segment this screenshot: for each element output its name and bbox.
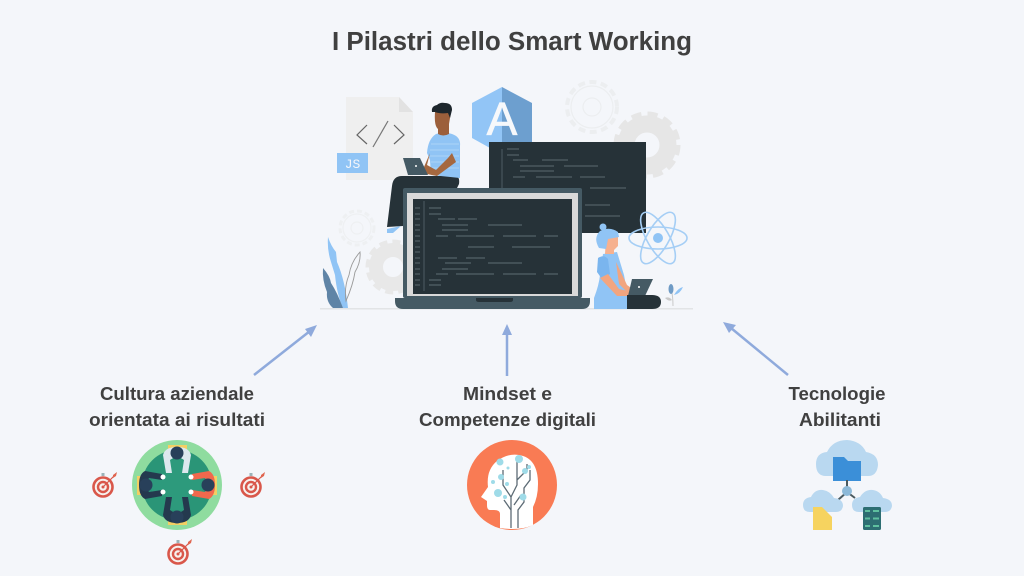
icon: target left <box>94 472 117 496</box>
label: Mindset e Competenze digitali <box>419 383 596 430</box>
icon: code document <box>346 97 413 180</box>
icon: grey gear right <box>616 114 678 176</box>
right person <box>192 471 217 499</box>
icon: React atom <box>629 207 687 269</box>
icon: grey gear lower left <box>368 242 418 292</box>
icon: outline gear lower left <box>340 211 374 245</box>
JS tag <box>337 153 368 173</box>
label: Cultura aziendale <box>89 383 265 430</box>
right cloud with server <box>852 490 892 530</box>
icon: Angular hexagon <box>472 87 532 152</box>
left cloud with document <box>803 490 843 530</box>
woman sitting with laptop <box>594 224 661 309</box>
central illustration: developers at work <box>320 82 693 310</box>
arrow: left pillar to illustration <box>254 325 317 375</box>
label: Mindset e Competenze digitali: Mindset e <box>463 383 552 404</box>
title: I Pilastri dello Smart Working <box>332 28 692 56</box>
connector <box>838 480 855 500</box>
label: Cultura aziendale: Cultura aziendale <box>100 383 254 404</box>
label: Tecnologie Abilitanti: Tecnologie <box>788 383 886 404</box>
left person <box>137 471 162 499</box>
JS tag: JS <box>345 157 360 172</box>
front laptop with code <box>395 188 590 309</box>
icon: team around table <box>132 440 222 530</box>
arrow: centre pillar to illustration <box>502 324 512 376</box>
bottom person <box>163 497 191 525</box>
man sitting with laptop <box>387 103 460 233</box>
icon: cloud network <box>803 440 892 530</box>
icon: Angular hexagon: A <box>487 93 518 145</box>
back monitor with code <box>489 142 646 233</box>
ground line <box>320 308 693 310</box>
label: Cultura aziendale: orientata ai risultati <box>89 409 265 430</box>
label: Tecnologie Abilitanti: Abilitanti <box>799 409 881 430</box>
icon: digital mind head <box>467 440 557 530</box>
arrow: right pillar to illustration <box>723 322 788 375</box>
icon: target right <box>242 472 265 496</box>
label: Mindset e Competenze digitali: Competenze digitali <box>419 409 596 430</box>
icon: outline gear top <box>567 82 617 132</box>
plant left <box>323 237 360 308</box>
label: Tecnologie Abilitanti <box>788 383 886 430</box>
icon: target bottom <box>168 539 192 564</box>
top cloud with folder <box>816 440 878 481</box>
top person <box>163 445 191 473</box>
plant right <box>665 284 683 306</box>
